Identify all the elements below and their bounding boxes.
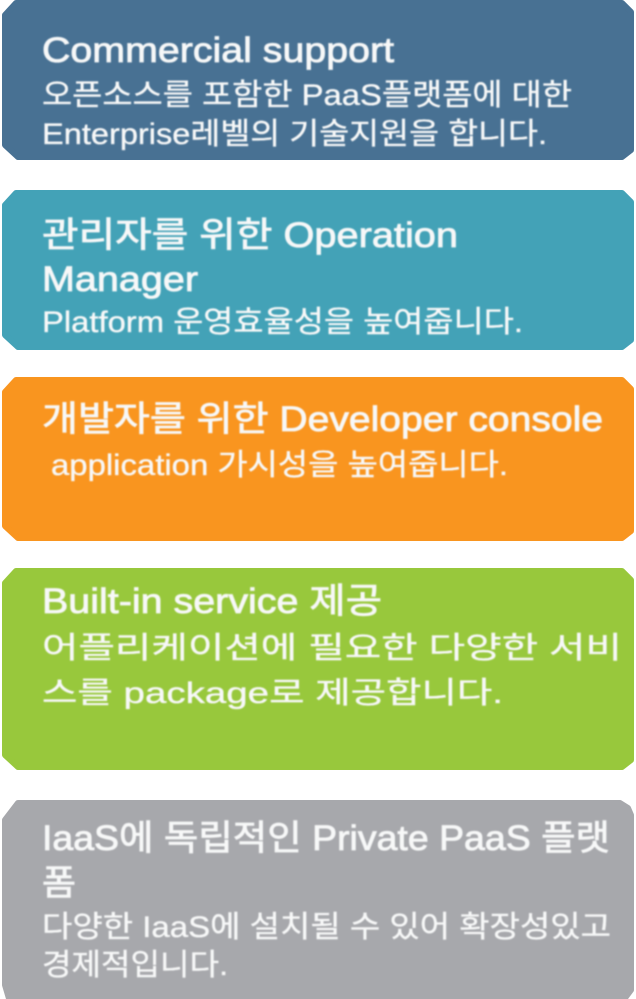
heading: IaaS independent Private PaaS platform: 폼 xyxy=(42,864,76,903)
text block: IaaS description: 다양한 IaaS에 설치될 수 있어 확장성있고 xyxy=(42,911,611,944)
heading: Built-in service: Built-in service 제공 xyxy=(42,582,382,621)
heading: Developer console: 개발자를 위한 Developer console xyxy=(42,400,603,439)
heading: IaaS independent Private PaaS platform xyxy=(42,819,610,903)
text block: Commercial support description: Enterprise레벨의 기술지원을 합니다. xyxy=(42,118,547,151)
heading: Commercial support: Commercial support xyxy=(42,31,394,70)
text block: Built-in service description xyxy=(42,632,622,710)
text block: IaaS description: 경제적입니다. xyxy=(42,949,228,982)
text block: Developer console description: application 가시성을 높여줍니다. xyxy=(51,449,508,482)
text block: Commercial support description xyxy=(42,79,572,151)
heading: IaaS independent Private PaaS platform: IaaS에 독립적인 Private PaaS 플랫 xyxy=(42,819,610,858)
text block: Operation Manager description: Platform 운영효율성을 높여줍니다. xyxy=(42,306,523,339)
text block: Built-in service description: 스를 package로 제공합니다. xyxy=(42,677,503,710)
panel: Built-in service xyxy=(5,571,631,767)
text block: Built-in service description: 어플리케이션에 필요한 다양한 서비 xyxy=(42,632,622,665)
panel: Operation Manager xyxy=(5,193,631,347)
panel: Developer console xyxy=(5,380,631,538)
panel: Commercial support xyxy=(5,3,631,157)
text block: IaaS description xyxy=(42,911,611,982)
heading: Operation Manager xyxy=(42,216,458,299)
text block: Commercial support description: 오픈소스를 포함한 PaaS플랫폼에 대한 xyxy=(42,79,572,112)
panel: IaaS independent Private PaaS xyxy=(5,803,631,999)
heading: Operation Manager: Manager xyxy=(42,260,198,299)
heading: Operation Manager: 관리자를 위한 Operation xyxy=(42,216,458,255)
